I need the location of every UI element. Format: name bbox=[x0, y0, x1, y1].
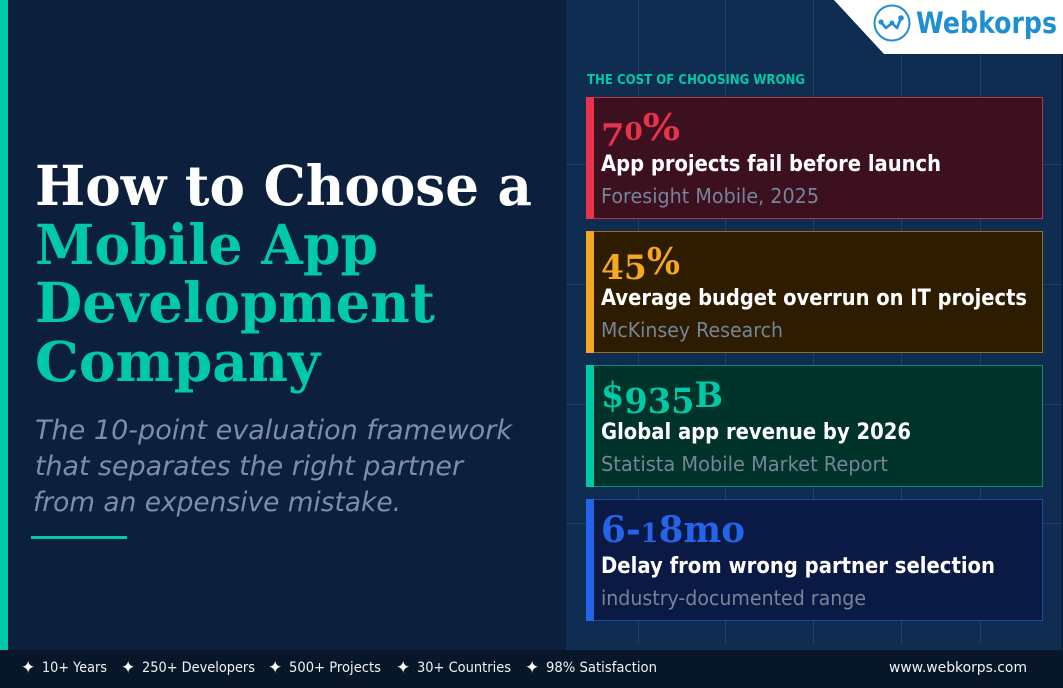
title: Mobile App bbox=[35, 212, 378, 277]
card: 45%: % bbox=[647, 241, 680, 283]
accent underline bbox=[31, 536, 127, 539]
subtitle: The 10-point evaluation framework bbox=[35, 415, 513, 446]
footer bar: ✦ bbox=[396, 658, 410, 678]
card: 6-18mo: 6-18mo bbox=[601, 509, 745, 551]
footer bar: ✦ bbox=[21, 658, 35, 678]
footer bar: 30+ Countries bbox=[417, 660, 511, 676]
section heading: THE COST OF CHOOSING WRONG bbox=[587, 73, 805, 88]
footer bar: 10+ Years bbox=[42, 660, 107, 676]
footer bar: 500+ Projects bbox=[289, 660, 381, 676]
card: 6-18mo: industry-documented range bbox=[601, 586, 866, 610]
footer bar bbox=[0, 650, 1063, 688]
card: 45% bbox=[586, 231, 1042, 353]
title: Development bbox=[35, 270, 436, 335]
card: $935B: Global app revenue by 2026 bbox=[601, 420, 911, 445]
accent bar: left edge bbox=[0, 0, 8, 650]
card: 70%: 0 bbox=[625, 117, 643, 146]
card: $935B: 935 bbox=[624, 381, 695, 422]
card: 45%: 45 bbox=[601, 248, 647, 288]
logo: Webkorps bbox=[834, 0, 1063, 54]
subtitle bbox=[33, 415, 513, 518]
panel: right background bbox=[566, 0, 1063, 650]
card: 70%: 7 bbox=[601, 118, 625, 154]
card: 70% bbox=[586, 97, 1042, 219]
card: $935B: B bbox=[695, 375, 723, 416]
subtitle: from an expensive mistake. bbox=[33, 487, 401, 518]
card: 70%: App projects fail before launch bbox=[601, 152, 941, 177]
card: $935B: $ bbox=[601, 375, 624, 416]
card: 45%: McKinsey Research bbox=[601, 318, 783, 342]
footer bar: www.webkorps.com bbox=[889, 660, 1027, 676]
title: Company bbox=[35, 329, 322, 394]
card: 70%: Foresight Mobile, 2025 bbox=[601, 184, 819, 208]
card: 6-18mo bbox=[586, 499, 1042, 621]
title bbox=[35, 153, 532, 394]
card: $935B bbox=[586, 365, 1042, 487]
footer bar: 250+ Developers bbox=[142, 660, 255, 676]
panel: left background bbox=[0, 0, 566, 650]
title: How to Choose a bbox=[35, 153, 532, 218]
footer bar: 98% Satisfaction bbox=[546, 660, 657, 676]
footer bar: ✦ bbox=[525, 658, 539, 678]
subtitle: that separates the right partner bbox=[35, 451, 465, 482]
footer bar: ✦ bbox=[268, 658, 282, 678]
card: $935B: Statista Mobile Market Report bbox=[601, 452, 888, 476]
card: 6-18mo: Delay from wrong partner selection bbox=[601, 554, 995, 579]
footer bar: ✦ bbox=[121, 658, 135, 678]
card: 70%: % bbox=[643, 107, 680, 149]
